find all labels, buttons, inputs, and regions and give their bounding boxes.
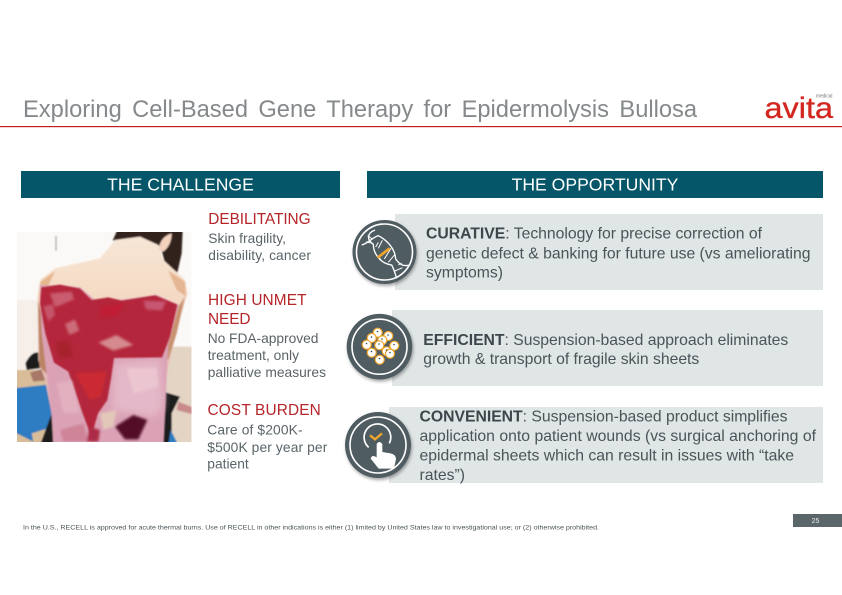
title: Exploring Cell-Based Gene Therapy for Epidermolysis Bullosa [23,97,698,123]
panel: convenient: application onto patient wounds (vs surgical anchoring of [420,428,817,445]
text block: high unmet need [208,292,326,380]
text block: cost burden [207,402,328,472]
header: the opportunity [367,171,823,198]
panel: convenient [389,407,823,484]
logo: avita medical: avita [764,92,833,125]
panel: convenient: rates”) [420,467,465,484]
text block: high unmet need: NEED [208,311,250,328]
panel: curative: symptoms) [426,264,503,282]
header: the challenge [21,171,340,198]
icon: DNA [352,220,416,284]
panel: efficient [392,310,823,386]
text block: cost burden: Care of $200K- [207,422,303,438]
text block: cost burden: patient [207,456,249,472]
text block: high unmet need: HIGH UNMET [208,292,307,309]
text block: high unmet need: No FDA-approved [208,331,318,346]
text block: debilitating: DEBILITATING [208,211,311,228]
icon: hand tapping check [345,412,411,478]
panel: curative: CURATIVE: Technology for precise correction of [426,225,763,242]
panel: convenient: epidermal sheets which can result in issues with “take [420,447,794,464]
text block: debilitating: disability, cancer [208,248,311,263]
text block: debilitating [208,211,311,263]
header: the challenge: THE CHALLENGE [107,174,254,194]
logo: avita medical: medical [816,94,832,100]
panel: convenient: CONVENIENT: Suspension-based product simplifies [420,409,788,426]
title rule [0,126,842,127]
icon: cells [347,314,412,380]
panel: efficient: EFFICIENT: Suspension-based approach eliminates [423,332,788,349]
page number: 25 [812,518,819,525]
footnote: In the U.S., RECELL is approved for acute thermal burns. Use of RECELL in other indications is either (1) limited by United States law to investigational use; or (2) otherwise prohibited. [23,524,599,532]
page number [793,514,842,527]
text block: cost burden: $500K per year per [207,440,328,455]
text block: debilitating: Skin fragility, [208,231,286,246]
panel: efficient: growth & transport of fragile skin sheets [423,351,699,368]
text block: cost burden: COST BURDEN [208,402,321,419]
text block: high unmet need: palliative measures [208,365,326,380]
text block: high unmet need: treatment, only [208,348,299,363]
header: the opportunity: THE OPPORTUNITY [512,174,679,194]
panel: curative [395,214,823,290]
panel: curative: genetic defect & banking for future use (vs ameliorating [426,246,810,262]
photo: patient back with wounds [13,230,197,445]
